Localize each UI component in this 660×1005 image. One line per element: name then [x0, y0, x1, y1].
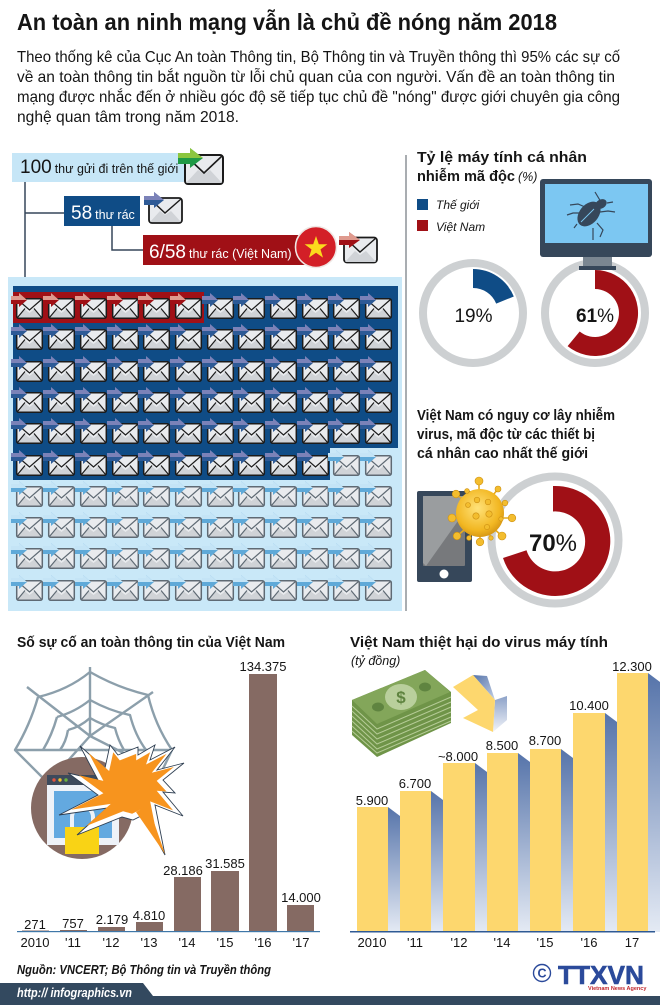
year labels: '16: [581, 935, 597, 950]
footer band: [0, 983, 660, 1005]
year labels: [358, 935, 639, 950]
icon: virus: [448, 477, 516, 546]
year labels: '14: [494, 935, 510, 950]
legend: Thế giới: [436, 198, 480, 212]
year labels: 2010: [21, 935, 49, 950]
vertical divider: [405, 155, 407, 611]
row 1 emails: [11, 293, 391, 318]
icon: down arrow: [453, 675, 507, 732]
donut: Vietnam 61%: [545, 263, 645, 363]
bars: [357, 673, 648, 932]
intro paragraph: Theo thống kê của Cục An toàn Thông tin, Bộ Thông tin và Truyền thông thì 95% các sự cố: [17, 49, 620, 66]
donut: 70%: [492, 476, 618, 604]
intro paragraph: [17, 49, 620, 126]
heading: Vietnam highest risk: [417, 407, 615, 462]
heading: infected personal computers: [417, 149, 587, 185]
year labels: [21, 935, 309, 950]
year labels: '12: [103, 935, 119, 950]
heading: virus damage chart: Việt Nam thiệt hại do virus máy tính: [350, 634, 608, 651]
year labels: '11: [65, 935, 81, 950]
legend: [417, 198, 485, 234]
box: 58 spam: 58thư rác: [71, 203, 135, 224]
box: 6/58 spam Vietnam: 6/58thư rác (Việt Nam): [149, 242, 292, 263]
value labels: [24, 659, 321, 932]
value labels: 31.585: [205, 856, 245, 871]
value labels: 757: [62, 916, 84, 931]
icon: stack of money: $: [396, 688, 406, 707]
icon: phone: [417, 491, 472, 582]
donut: world 19%: [423, 263, 523, 363]
bar chart: incidents: [17, 659, 321, 950]
year labels: '15: [537, 935, 553, 950]
year labels: '17: [293, 935, 309, 950]
intro paragraph: nghệ quan tâm trong năm 2018.: [17, 109, 239, 126]
footer band: http:// infographics.vn: [17, 985, 132, 1000]
heading: Vietnam highest risk: cá nhân cao nhất thế giới: [417, 446, 588, 462]
heading: virus damage chart: (tỷ đồng): [351, 654, 400, 668]
heading: virus damage chart: [350, 634, 608, 668]
year labels: '12: [451, 935, 467, 950]
legend: Việt Nam: [436, 220, 485, 234]
year labels: '15: [217, 935, 233, 950]
heading: infected personal computers: nhiễm mã độc(%): [417, 168, 537, 185]
icon: red arrow envelope: [339, 232, 377, 262]
icon: browser window with lock: [31, 757, 133, 859]
panel: grid of 100 emails: [8, 277, 402, 611]
year labels: '16: [255, 935, 271, 950]
intro paragraph: về an toàn thông tin bắt nguồn từ lỗi chủ quan của con người. Vấn đề an toàn thông tin: [17, 67, 615, 86]
year labels: 17: [625, 935, 639, 950]
value labels: 4.810: [133, 908, 165, 923]
heading: incidents chart: Số sự cố an toàn thông tin của Việt Nam: [17, 634, 285, 651]
icon: explosion: [59, 745, 184, 855]
donut: 70%: 70%: [529, 530, 577, 557]
value labels: 2.179: [96, 912, 128, 927]
row 6 emails: [11, 450, 391, 475]
icon: stack of money: [352, 670, 451, 757]
rows 7 to 10 emails: [11, 481, 391, 600]
heading: infected personal computers: Tỷ lệ máy tính cá nhân: [417, 149, 587, 166]
value labels: 28.186: [163, 863, 203, 878]
donut: world 19%: 19%: [454, 306, 493, 327]
value labels: 5.900: [356, 793, 388, 808]
bar shadows: [388, 673, 660, 932]
value labels: 14.000: [281, 890, 321, 905]
logo: TTXVN: C: [537, 966, 547, 980]
box: 100 emails: [12, 153, 184, 182]
value labels: ~8.000: [438, 749, 478, 764]
intro paragraph: mạng được nhắc đến ở nhiều góc độ sẽ tiếp tục chủ đề "nóng" được giới chuyên gia công: [17, 87, 620, 106]
rows 2 to 5 emails: [11, 324, 391, 443]
icon: bug: [567, 192, 615, 240]
logo: TTXVN: TTXVN: [558, 960, 644, 990]
heading: Vietnam highest risk: Việt Nam có nguy cơ lây nhiễm: [417, 407, 615, 424]
value labels: 10.400: [569, 698, 609, 713]
email flow diagram: [12, 148, 377, 279]
box: 6/58 spam Vietnam: [143, 235, 325, 265]
icon: green arrow envelope: [178, 148, 223, 184]
value labels: 271: [24, 917, 46, 932]
box: 100 emails: 100thư gửi đi trên thế giới: [20, 157, 178, 178]
source: Nguồn: VNCERT; Bộ Thông tin và Truyền thông: [17, 962, 271, 977]
bar chart: damage: [350, 659, 660, 950]
logo: TTXVN: Vietnam News Agency: [588, 986, 647, 992]
year labels: '14: [179, 935, 195, 950]
icon: monitor with bug: [540, 179, 652, 270]
icon: spider web: [15, 667, 172, 783]
value labels: 134.375: [240, 659, 286, 674]
value labels: 8.700: [529, 733, 561, 748]
value labels: 6.700: [399, 776, 431, 791]
title: An toàn an ninh mạng vẫn là chủ đề nóng năm 2018: [17, 8, 557, 35]
value labels: 8.500: [486, 738, 518, 753]
heading: Vietnam highest risk: virus, mã độc từ các thiết bị: [417, 427, 595, 443]
year labels: 2010: [358, 935, 386, 950]
donut: Vietnam 61%: 61%: [576, 306, 614, 327]
value labels: [356, 659, 652, 808]
icon: Vietnam flag: [296, 226, 336, 268]
box: 58 spam: [64, 196, 140, 226]
icon: blue arrow envelope: [144, 192, 182, 223]
value labels: 12.300: [612, 659, 652, 674]
year labels: '13: [141, 935, 157, 950]
year labels: '11: [407, 935, 423, 950]
